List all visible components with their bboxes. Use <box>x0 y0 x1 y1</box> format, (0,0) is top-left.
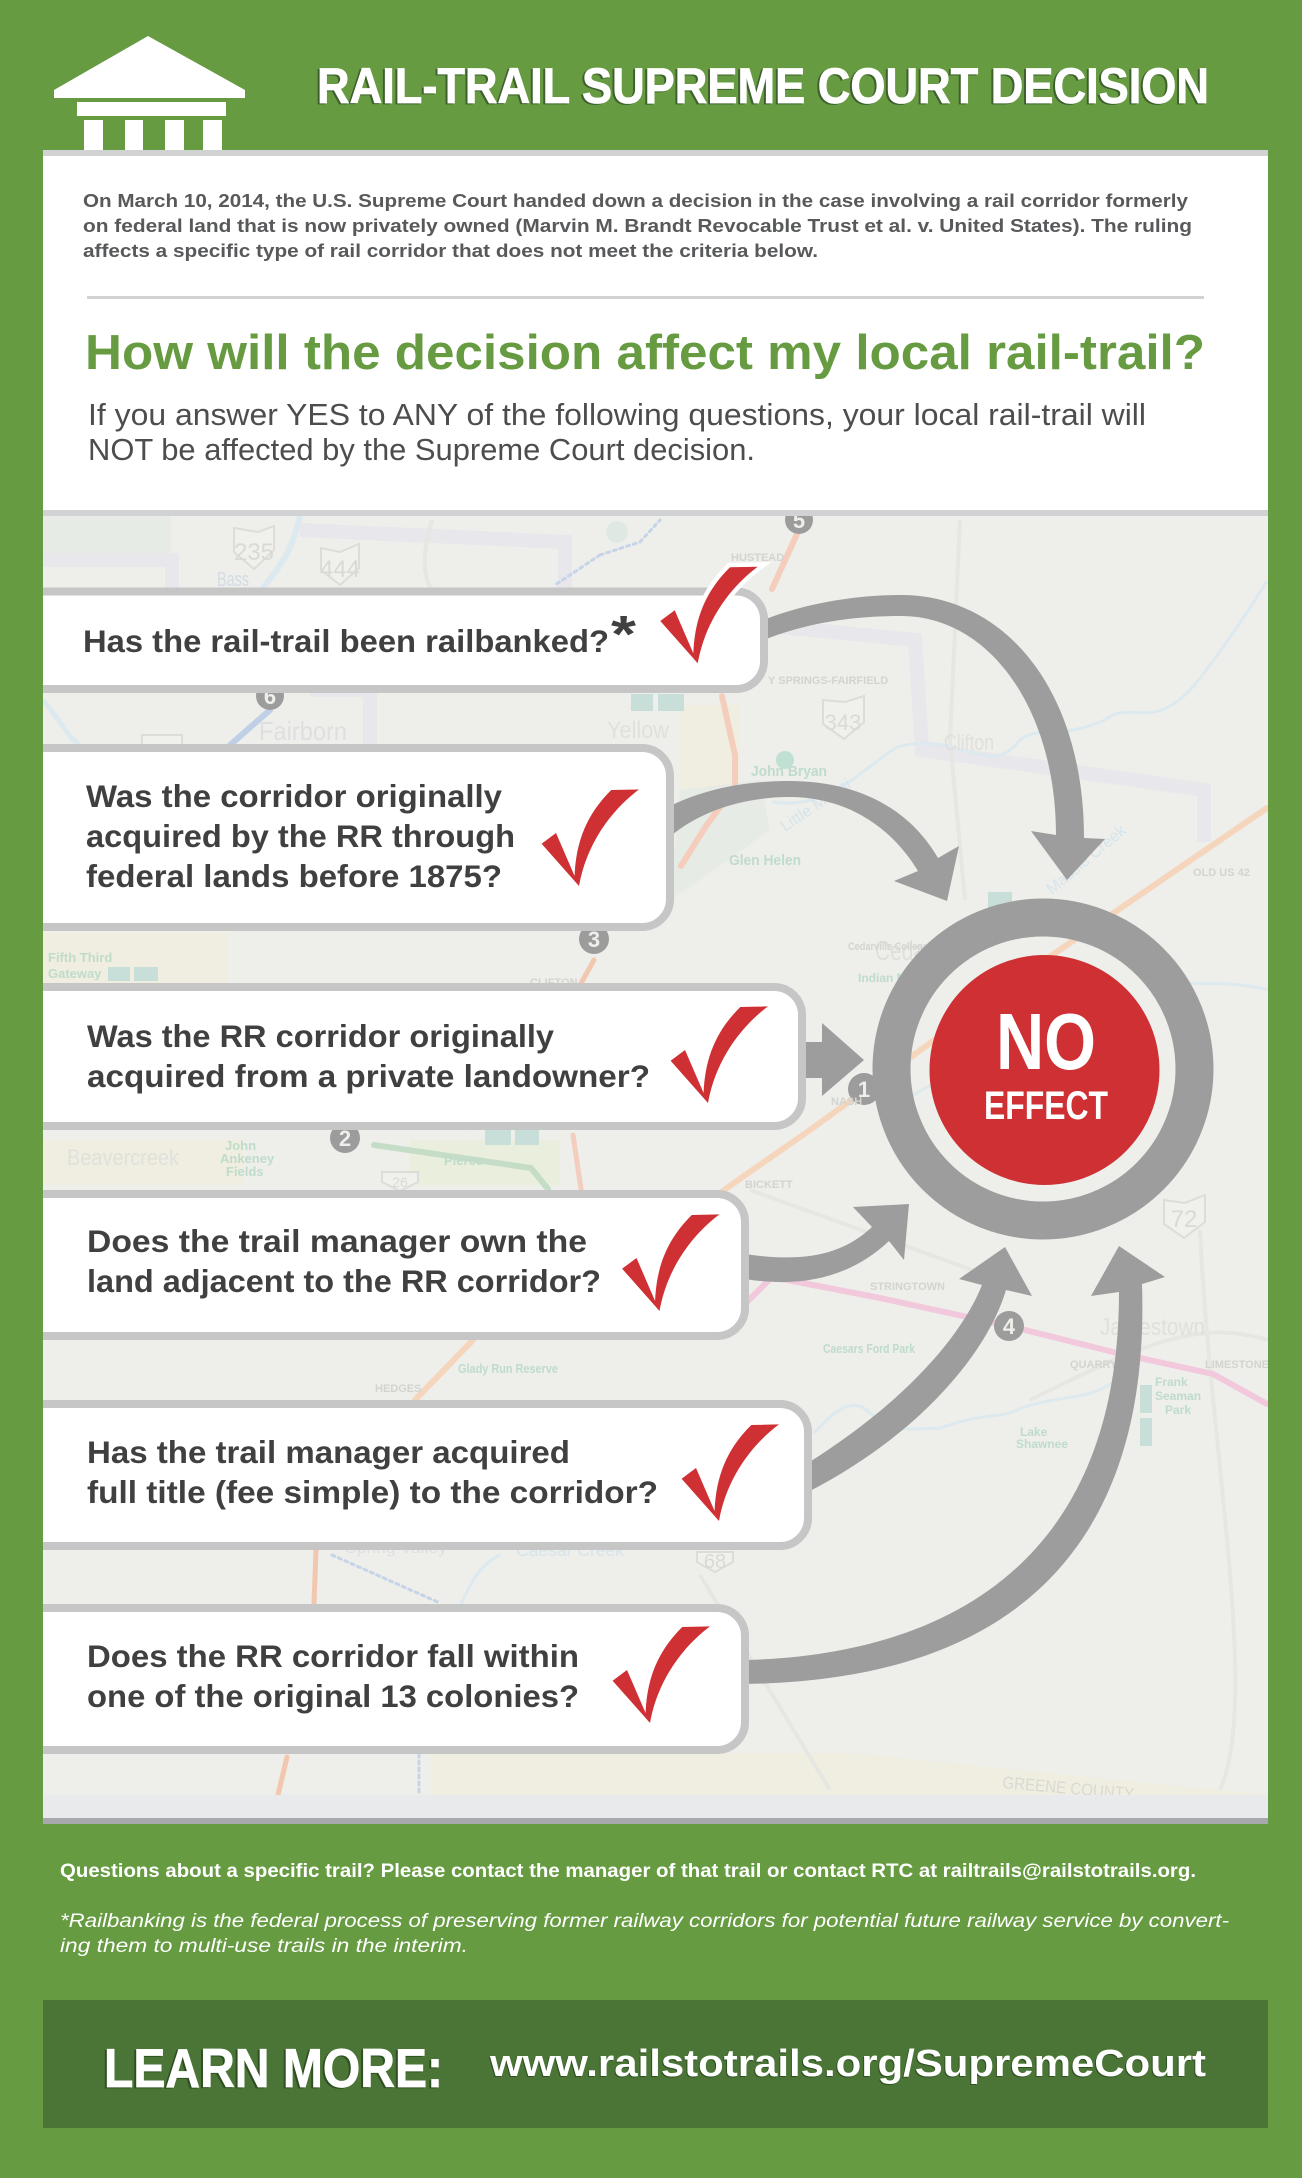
panel: learn more <box>43 2000 1268 2128</box>
instruction text: NOT be affected by the Supreme Court decision. <box>88 432 755 467</box>
map labels: Lake <box>1020 1425 1048 1439</box>
panel: introduction <box>43 150 1268 516</box>
map labels: CLIFTON <box>530 977 578 989</box>
map labels: Gateway <box>48 966 102 981</box>
map labels: 343 <box>825 710 861 735</box>
park icons <box>108 521 1152 1446</box>
title: RAIL-TRAIL SUPREME COURT DECISION <box>317 58 1209 114</box>
question 1 <box>30 567 764 689</box>
footnote: railbanking: ing them to multi-use trails in the interim. <box>60 1936 468 1957</box>
map labels: OLD US 42 <box>1193 867 1250 879</box>
learn more label: LEARN MORE: <box>104 2037 443 2099</box>
question 5: Has the trail manager acquired <box>87 1434 570 1470</box>
map labels: Cedarville College <box>848 941 928 953</box>
question 2 <box>30 748 670 927</box>
map labels: Bass <box>217 569 249 591</box>
route markers <box>256 506 1024 1341</box>
map labels: Shawnee <box>1016 1437 1068 1451</box>
icon: courthouse <box>54 36 245 150</box>
map labels: Caesar Creek <box>516 1541 625 1560</box>
map labels: Y SPRINGS-FAIRFIELD <box>768 675 888 687</box>
question 1: * <box>611 606 637 664</box>
map labels: 26 <box>392 1174 408 1190</box>
map labels: Jamestown <box>1100 1314 1205 1341</box>
icon: check mark <box>671 1006 768 1103</box>
question 3: acquired from a private landowner? <box>87 1058 650 1094</box>
icon: check mark <box>613 1626 710 1723</box>
map labels: STRINGTOWN <box>870 1281 945 1293</box>
question 6 <box>30 1608 745 1750</box>
badge: no effect: NO <box>996 997 1096 1086</box>
icon: check mark <box>660 567 758 663</box>
route markers: 4 <box>1003 1314 1016 1339</box>
intro paragraph: On March 10, 2014, the U.S. Supreme Court handed down a decision in the case involving a rail corridor formerly <box>83 190 1189 211</box>
map labels: Seaman <box>1155 1389 1201 1403</box>
icon: check mark <box>622 1214 720 1311</box>
map labels: 68 <box>704 1551 726 1573</box>
map labels: Pierce <box>444 1153 483 1168</box>
question 6: Does the RR corridor fall within <box>87 1638 579 1674</box>
question 4: Does the trail manager own the <box>87 1223 587 1259</box>
map labels: Glady Run Reserve <box>458 1361 558 1376</box>
icon: check mark <box>682 1424 779 1521</box>
map labels: Spring Valley <box>345 1540 447 1557</box>
rivers <box>43 516 1268 1700</box>
question 1: Has the rail-trail been railbanked? <box>83 623 609 659</box>
badge: no effect <box>892 918 1194 1220</box>
icon: check mark <box>542 789 639 886</box>
arrow: railbanked to no effect <box>766 595 1105 880</box>
route markers: 6 <box>264 684 276 709</box>
instruction text: If you answer YES to ANY of the following questions, your local rail-trail will <box>88 397 1146 432</box>
map labels: 235 <box>234 539 274 566</box>
map labels <box>48 539 1269 1803</box>
map labels: Fairborn <box>259 716 347 746</box>
map labels: HUSTEAD <box>731 552 784 564</box>
route markers: 5 <box>793 508 805 533</box>
instruction text <box>88 397 1146 467</box>
map labels: BICKETT <box>745 1179 793 1191</box>
panel: map background <box>43 506 1269 1803</box>
map labels: NASH <box>831 1096 862 1108</box>
question 2: federal lands before 1875? <box>86 858 502 894</box>
url: www.railstotrails.org/SupremeCourt <box>489 2043 1206 2085</box>
map labels: Massie Creek <box>1044 822 1130 898</box>
question 5: full title (fee simple) to the corridor? <box>87 1474 658 1510</box>
question 4 <box>30 1194 745 1336</box>
arrow: 13 colonies to no effect <box>745 1246 1165 1684</box>
arrow: private landowner to no effect <box>800 1023 864 1096</box>
map labels: Caesars Ford Park <box>823 1341 916 1356</box>
map labels: LIMESTONE <box>1205 1359 1269 1371</box>
question 3: Was the RR corridor originally <box>87 1018 554 1054</box>
faint highways <box>43 530 1204 842</box>
map labels: Clifton <box>944 730 994 755</box>
question 4: land adjacent to the RR corridor? <box>87 1263 601 1299</box>
map labels: John Bryan <box>751 763 827 780</box>
intro paragraph: affects a specific type of rail corridor that does not meet the criteria below. <box>83 240 818 261</box>
map labels: Yellow <box>607 717 670 744</box>
map labels: Glen Helen <box>729 852 801 869</box>
badge: no effect: EFFECT <box>984 1084 1108 1128</box>
heading: How will the decision affect my local rail-trail? <box>85 326 1205 380</box>
arrow: fee simple to no effect <box>808 1247 1032 1492</box>
map labels: Fields <box>226 1164 264 1179</box>
intro paragraph <box>83 190 1192 261</box>
map labels: Beavercreek <box>67 1145 180 1170</box>
route markers: 3 <box>588 927 600 952</box>
highway shields <box>142 526 1205 1572</box>
footnote: railbanking: *Railbanking is the federal process of preserving former railway corridors for potential future railway service by convert- <box>60 1911 1229 1932</box>
map labels: GREENE COUNTY <box>1002 1773 1135 1803</box>
map labels: Indian Mound <box>858 971 936 985</box>
intro paragraph: on federal land that is now privately owned (Marvin M. Brandt Revocable Trust et al. v. United States). The ruling <box>83 215 1192 236</box>
map labels: Ankeney <box>220 1151 275 1166</box>
map labels: Park <box>1165 1403 1191 1417</box>
question 3 <box>30 987 802 1126</box>
map labels: Ceda <box>875 935 925 966</box>
map labels: QUARRY <box>1070 1359 1118 1371</box>
map labels: Fifth Third <box>48 950 112 965</box>
footnote: railbanking <box>60 1911 1229 1957</box>
map labels: Little Miami <box>778 776 854 835</box>
question 5 <box>30 1404 808 1546</box>
map labels: Frank <box>1155 1375 1188 1389</box>
map labels: HEDGES <box>375 1383 421 1395</box>
trail lines <box>230 520 1267 1795</box>
question 2: acquired by the RR through <box>86 818 515 854</box>
arrow: federal lands to no effect <box>672 781 959 901</box>
contact note: Questions about a specific trail? Please contact the manager of that trail or contact RTC at railtrails@railstotrails.org. <box>60 1861 1196 1882</box>
route markers: 2 <box>339 1126 351 1151</box>
question 6: one of the original 13 colonies? <box>87 1678 579 1714</box>
map labels: 72 <box>1171 1206 1197 1233</box>
arrow: adjacent land to no effect <box>745 1204 909 1282</box>
map labels: John <box>225 1138 256 1153</box>
question 2: Was the corridor originally <box>86 778 502 814</box>
route markers: 1 <box>858 1077 870 1102</box>
map labels: 444 <box>320 556 360 583</box>
